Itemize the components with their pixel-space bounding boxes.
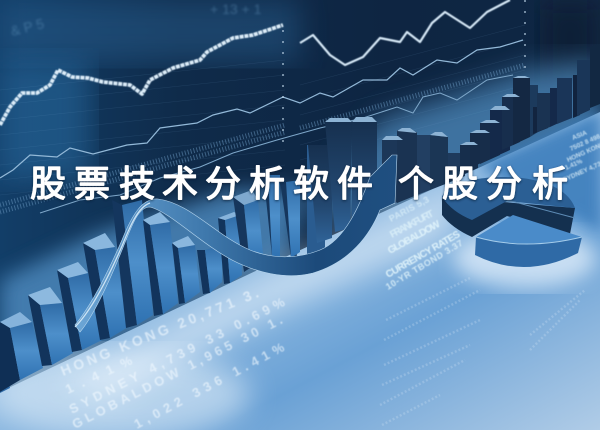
line chart: white trend continuation — [300, 0, 510, 65]
floor ticker text: GLOBALDOW 1,965 30 1. — [70, 312, 285, 430]
pie: detached wedge top — [476, 215, 582, 244]
light reflective floor — [0, 112, 600, 430]
floor ticker text: 1,022 336 1.41% — [131, 339, 287, 430]
scale dots — [283, 0, 525, 150]
pie: main disc top — [442, 177, 575, 220]
title: 股票技术分析软件 个股分析 — [30, 155, 568, 207]
curve arrow ribbon — [75, 155, 397, 332]
faint numbers at top of screen — [9, 1, 262, 39]
upper right ticker text: 1.41% — [564, 158, 584, 172]
right ticker text: GLOBALDOW — [386, 219, 443, 257]
line chart: white candlestick trend — [0, 25, 283, 125]
volume bars strip — [0, 65, 525, 212]
floor ticker text: SYDNEY 4,739 33 0.69% — [67, 294, 288, 417]
faint data rows on floor — [380, 278, 585, 425]
pie: detached wedge side — [475, 237, 582, 267]
right ticker text: FRANKFURT — [388, 208, 436, 241]
right ticker text: CURRENCY RATES — [384, 229, 463, 281]
pie chart — [442, 177, 582, 267]
upper right ticker text — [562, 129, 600, 184]
line chart: mid trend line — [0, 40, 523, 178]
upper right ticker text: ASIA — [571, 129, 588, 142]
right ticker text — [384, 194, 464, 292]
line chart: lower trend line — [40, 75, 513, 213]
faint numbers at top of screen: + 13 + 1 — [210, 1, 262, 17]
right ticker text: 10-YR TBOND 3.37 — [384, 238, 464, 292]
floor ticker text: HONG KONG 20,771 3. — [58, 285, 261, 379]
right ticker text: PARIS 5,3 — [387, 194, 431, 224]
pie: main disc side — [442, 197, 575, 237]
bar chart: right staircase bars — [307, 45, 600, 258]
floor ticker text: 1.41% — [63, 353, 135, 397]
bar chart: left rising blue bars — [0, 170, 300, 393]
faint numbers at top of screen: & P 5 — [9, 15, 46, 39]
